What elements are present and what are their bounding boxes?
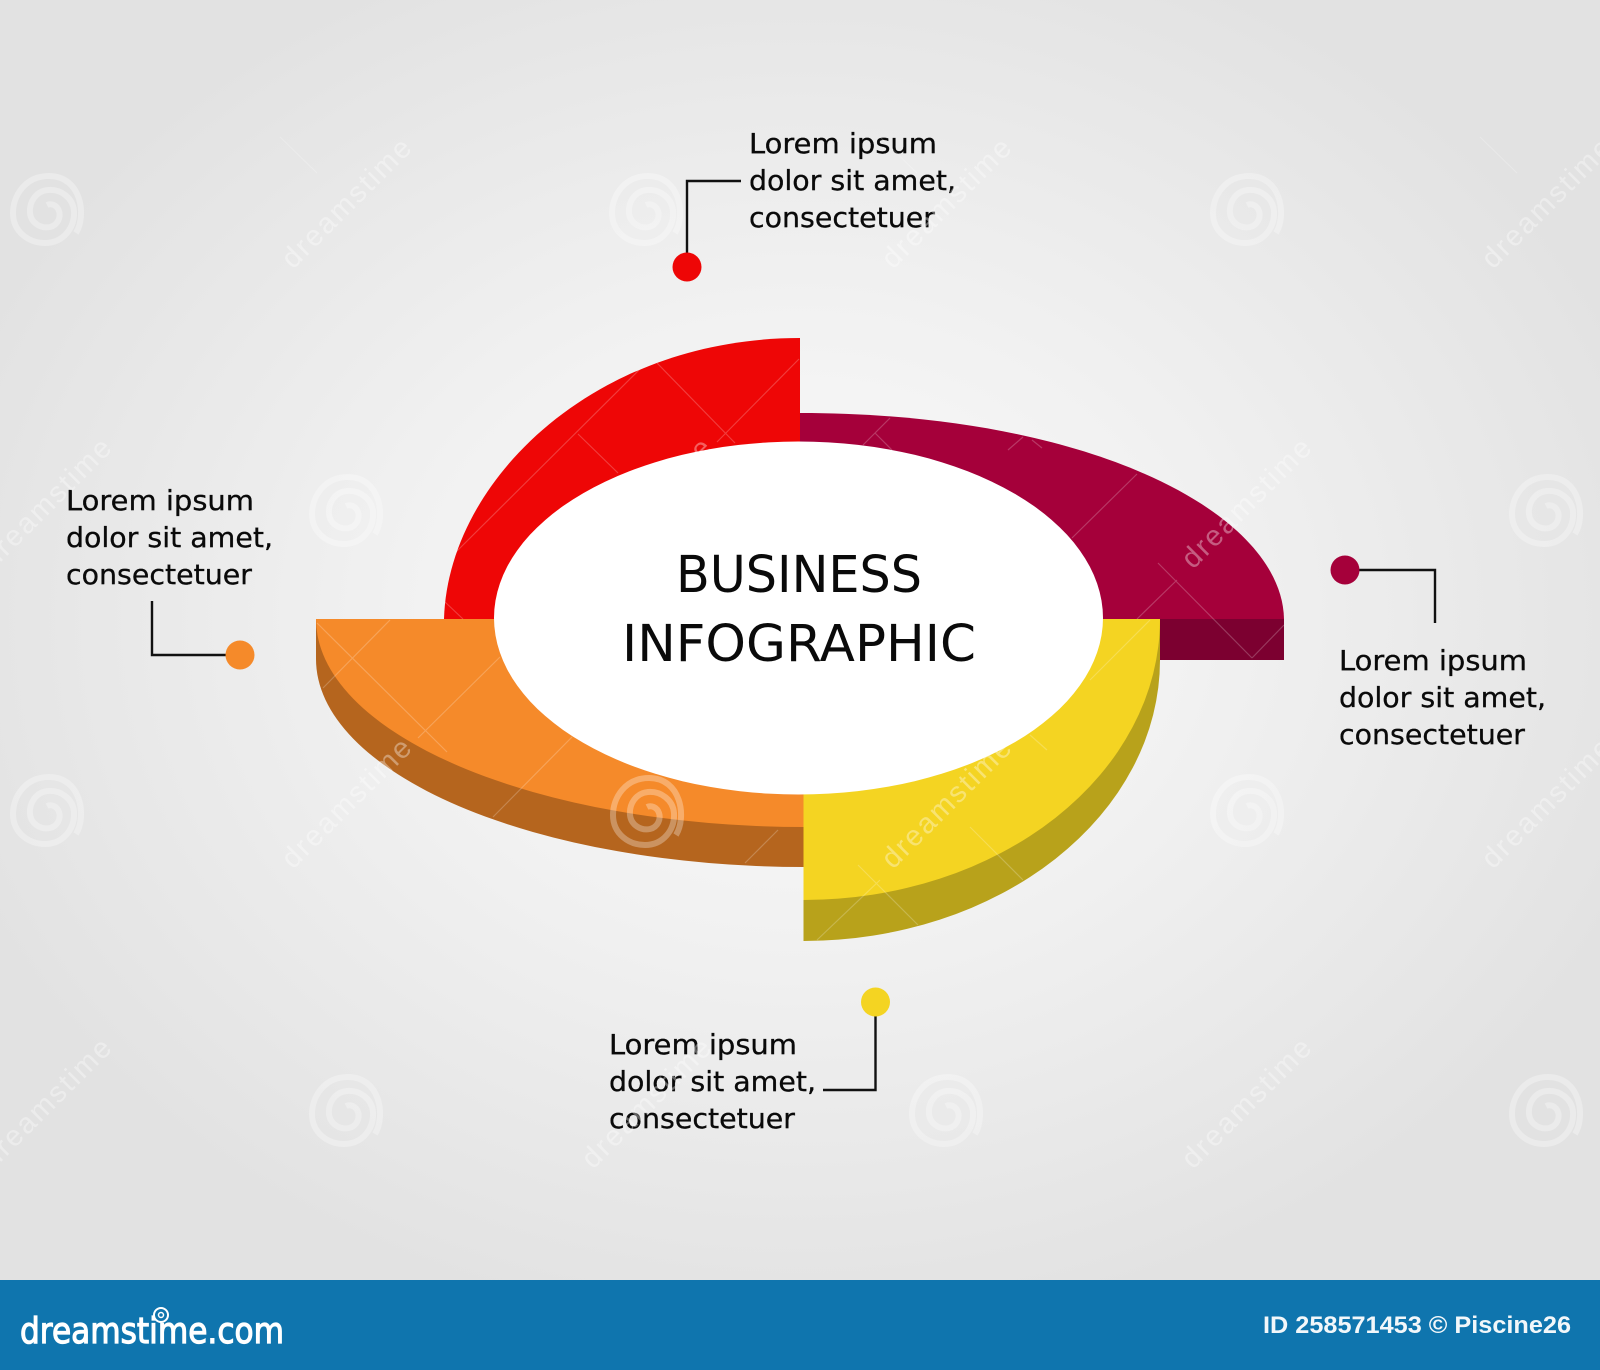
title: BUSINESS	[676, 546, 922, 605]
logo: dreamstime.com	[20, 1311, 284, 1352]
watermark text: dreamstime	[875, 132, 1018, 275]
watermark text: dreamstime	[875, 732, 1018, 875]
segment: orange	[316, 619, 804, 867]
callout: left orange	[66, 484, 273, 670]
title	[622, 546, 976, 674]
callout: left orange: dolor sit amet,	[66, 521, 273, 554]
callout: right maroon: dolor sit amet,	[1339, 681, 1546, 714]
segment: maroon	[800, 413, 1284, 660]
callout: top red: consectetuer	[749, 201, 935, 234]
watermark text: dreamstime	[575, 1032, 718, 1175]
callout: bottom yellow	[609, 988, 890, 1135]
watermark spirals	[13, 176, 1580, 1144]
callout: right maroon: consectetuer	[1339, 718, 1525, 751]
watermark text: dreamstime	[575, 432, 718, 575]
watermark text: dreamstime	[275, 132, 418, 275]
watermark text	[0, 132, 1600, 1175]
callout: top red: dolor sit amet,	[749, 164, 956, 197]
callout: left orange: consectetuer	[66, 558, 252, 591]
watermark text: dreamstime	[1175, 1032, 1318, 1175]
watermark lines	[280, 137, 1517, 940]
callout: top red: Lorem ipsum	[749, 127, 937, 160]
callout: right maroon: Lorem ipsum	[1339, 644, 1527, 677]
ring chart	[316, 338, 1284, 941]
segment: yellow	[804, 619, 1160, 941]
watermark text: dreamstime	[275, 732, 418, 875]
center ellipse	[494, 442, 1103, 794]
title: INFOGRAPHIC	[622, 615, 976, 674]
callout: bottom yellow: Lorem ipsum	[609, 1028, 797, 1061]
watermark text: dreamstime	[1175, 432, 1318, 575]
callout: top red	[672, 127, 956, 282]
segment: red	[444, 338, 800, 619]
image id: ID 258571453 © Piscine26	[1263, 1312, 1571, 1339]
callout: left orange: Lorem ipsum	[66, 484, 254, 517]
callout: right maroon	[1330, 556, 1546, 751]
callout: bottom yellow: consectetuer	[609, 1102, 795, 1135]
callout: bottom yellow: dolor sit amet,	[609, 1065, 816, 1098]
footer banner	[0, 1280, 1600, 1370]
